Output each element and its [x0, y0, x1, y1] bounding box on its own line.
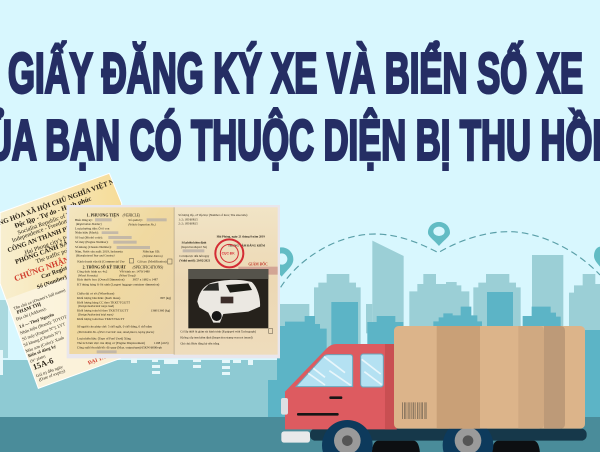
card text: Số máy (Engine N°): LYT	[21, 321, 66, 342]
card text: PHÒNG CẢNH SÁT GIAO THÔNG	[14, 222, 116, 266]
title	[0, 40, 600, 172]
cab shade	[385, 344, 397, 429]
card lower section	[6, 278, 120, 388]
window glare	[308, 357, 382, 385]
booklet cover edge	[67, 205, 280, 358]
left page text: Biển đăng ký:	[75, 217, 93, 222]
right page text: Không cấp tem kiểm định (Inspection stamp was not issued)	[180, 334, 253, 339]
booklet right page	[174, 207, 278, 355]
card text: Car Registration	[41, 260, 84, 281]
card text: Lê — Thuỷ Nguyên	[19, 312, 55, 329]
card text: Giá trị đến ngày	[35, 364, 64, 378]
left page text	[75, 212, 171, 349]
left page text: Nhãn hiệu (Mark):	[75, 231, 99, 235]
dark building beside card	[268, 340, 285, 417]
left page text: Khối lượng hàng CC theo TKKT/TGGTT	[77, 300, 130, 304]
dashed route	[281, 232, 600, 287]
front wheel	[322, 420, 373, 452]
red seal stamp: CỤC ĐK	[222, 252, 235, 256]
left page text: Năm, Nước sản xuất: 2019, Indonesia	[75, 249, 123, 254]
card text: Socialist Republic of Vietnam	[17, 205, 87, 237]
card text: (Date of expiry)	[38, 368, 66, 382]
card text: CÔNG AN THÀNH PHỐ HẢI PHÒNG	[6, 208, 115, 254]
card text: The traffic police	[35, 244, 77, 265]
card text: (N° plate)	[29, 353, 47, 364]
right page text: Có hiệu lực đến hết ngày	[179, 254, 210, 258]
pin center	[428, 222, 450, 246]
left page text: (Permissible No. of Pers Carried: seat, stood places, laying places)	[78, 330, 154, 334]
card background	[0, 173, 122, 388]
card text: Địa chỉ (Address):	[15, 306, 47, 322]
truck cab	[285, 344, 397, 429]
card white edge	[0, 173, 122, 388]
card text: Nhãn hiệu (Brand): TOYOTA	[19, 313, 71, 336]
left page text: Khối lượng bản thân: (Kerb mass)	[77, 296, 120, 300]
door handle	[329, 396, 342, 399]
cargo box	[394, 326, 585, 429]
card text: Independence - Freedom - Happiness	[11, 208, 98, 244]
left page text: (VEHICLE)	[123, 213, 141, 217]
building windows	[0, 350, 253, 375]
right page text: Hải Phòng, ngày 21 tháng 8 năm 2019	[217, 234, 265, 238]
card text: Số khung (Chassis N°)	[23, 329, 62, 348]
left page text: Vết bánh xe: 1470/1480	[119, 270, 150, 274]
right page text: Số lượng lốp, cỡ lốp/trục (Number of tires; Tire size/axle)	[178, 213, 247, 218]
left page text: (Registration Number)	[76, 222, 102, 226]
truck chassis	[310, 429, 587, 441]
card text: NG HÒA XÃ HỘI CHỦ NGHĨA VIỆT NAM	[0, 174, 127, 227]
right page text	[178, 213, 268, 345]
left page text: (Vehicle Inspection No.)	[128, 223, 156, 227]
delivery truck	[281, 326, 587, 452]
pin left	[270, 247, 293, 277]
right page text: 1: 2; 185/60R15	[178, 218, 198, 222]
car photo	[188, 269, 268, 328]
right page text: (Valid until): 20/02/2021	[179, 259, 211, 263]
redacted blurred strips	[95, 218, 204, 353]
left page text: Công thức bánh xe: 4x2	[77, 270, 108, 274]
signature band	[238, 267, 278, 275]
right page text: Số phiếu kiểm định	[182, 240, 207, 245]
city skyline	[280, 241, 600, 420]
right page text: Có lắp thiết bị giám sát hành trình (Equipped with Tachograph)	[180, 328, 256, 333]
booklet left page	[69, 207, 174, 354]
left page text: Chiều dài cơ sở: (Wheelbase)	[77, 291, 114, 295]
left page text: Thể tích làm việc của động cơ (Engine Displacement)	[77, 340, 145, 345]
card text: PHẠM THỊ	[16, 302, 42, 316]
ground road	[0, 417, 600, 452]
right page text: TRUNG TÂM ĐĂNG KIỂM	[228, 243, 265, 248]
left page text: (Wheel Formula)	[78, 273, 98, 277]
route and map pins	[270, 222, 600, 287]
left page text: Kích thước bao: (Overall Dimension)	[77, 278, 124, 282]
left page text: KT thùng hàng lò lòi xinh (Largest luggage container dimension)	[77, 282, 159, 286]
card text: Biển số đăng ký	[27, 343, 57, 358]
dark buildings	[280, 292, 600, 420]
rear wheels	[372, 441, 540, 452]
side window	[361, 354, 383, 387]
left page text: 1198 (cm3)	[154, 341, 169, 345]
left page text: 3857 x 1682 x 1487	[133, 278, 158, 282]
left page text: Số người cho phép chở: 5 chỗ ngồi, 0 chỗ đứng, 0 chỗ nằm	[77, 324, 152, 330]
left page text: Niên hạn SD:	[143, 249, 160, 253]
middle wheel	[443, 420, 493, 452]
light buildings	[280, 241, 600, 420]
card text: Độc lập - Tự do - Hạnh phúc	[14, 195, 93, 230]
left page text: (SPECIFICATIONS)	[133, 265, 164, 269]
left ground band	[0, 360, 277, 420]
left page text: 2. THÔNG SỐ KỸ THUẬT	[83, 264, 126, 269]
left page text: Công suất lớn nhất/tốc độ quay (Max. output/rpm) 65KW/6000vph	[77, 345, 162, 349]
left page text: Số máy (Engine Number):	[75, 240, 109, 244]
front bumper	[281, 431, 310, 443]
card text: Số (Number):	[36, 273, 70, 291]
card text: 15A-6	[32, 356, 55, 372]
right page text: 2: 2; 185/60R15	[178, 222, 198, 226]
card text: Hai Phong city's Public Security	[24, 224, 99, 257]
windshield	[296, 355, 353, 387]
vehicle registration card	[0, 173, 280, 388]
left page text: Cải tạo: (Modification)	[137, 259, 167, 263]
left page text: 897 (kg)	[160, 296, 171, 300]
headlight	[281, 398, 288, 415]
pin right	[594, 247, 600, 267]
right page text: GIÁM ĐỐC	[248, 262, 268, 267]
left page text: (Design/Authorized cargo load)	[78, 304, 114, 308]
door sill line	[297, 413, 339, 416]
left page text: 1360/1360 (kg)	[151, 309, 170, 313]
left page text: (Lifetime limit to)	[143, 254, 163, 258]
checkboxes	[129, 259, 273, 333]
red seal stamp	[215, 239, 243, 267]
card text: Tên chủ xe (Owner's full name)	[13, 287, 67, 311]
card text: Màu sơn (Color): Xanh	[25, 335, 65, 354]
left page text: Số loại (Model code):	[75, 236, 103, 240]
card text: ĐẠI TÁ	[87, 353, 107, 367]
card text	[0, 180, 113, 382]
left page text: Số quản lý:	[128, 218, 143, 222]
left page text: Số khung (Chassis Number):	[75, 245, 112, 249]
white car	[197, 280, 260, 323]
left page text: (Manufactured Year and Country)	[76, 254, 115, 258]
left building strip	[0, 300, 8, 358]
card text: CHỨNG NHẬN ĐĂNG KÝ XE	[13, 235, 123, 283]
left page text: Khối lượng toàn bộ theo TKKT/TGGTT	[77, 309, 128, 313]
barcode	[402, 402, 427, 419]
left page text: Khối lượng toàn theo TKKT/TGGTT	[77, 317, 124, 321]
left page text: 1. PHƯƠNG TIỆN	[87, 212, 119, 217]
left page text: Loại nhiên liệu: (Type of Fuel Used) Xăng	[77, 336, 131, 340]
booklet fold	[173, 207, 176, 355]
left page text: (Design/Authorized total mass)	[78, 312, 113, 316]
right page text: (Inspection Report No)	[181, 245, 207, 249]
left page text: (Wheel Tread)	[119, 273, 136, 277]
left page text: Loại phương tiện: Ô tô con	[75, 225, 110, 230]
left page text: Kinh doanh vận tải (Commercial Use	[77, 259, 125, 263]
inspection booklet	[67, 205, 280, 358]
right page text: Ghi chú: Biển đăng ký nền trắng	[180, 340, 220, 345]
